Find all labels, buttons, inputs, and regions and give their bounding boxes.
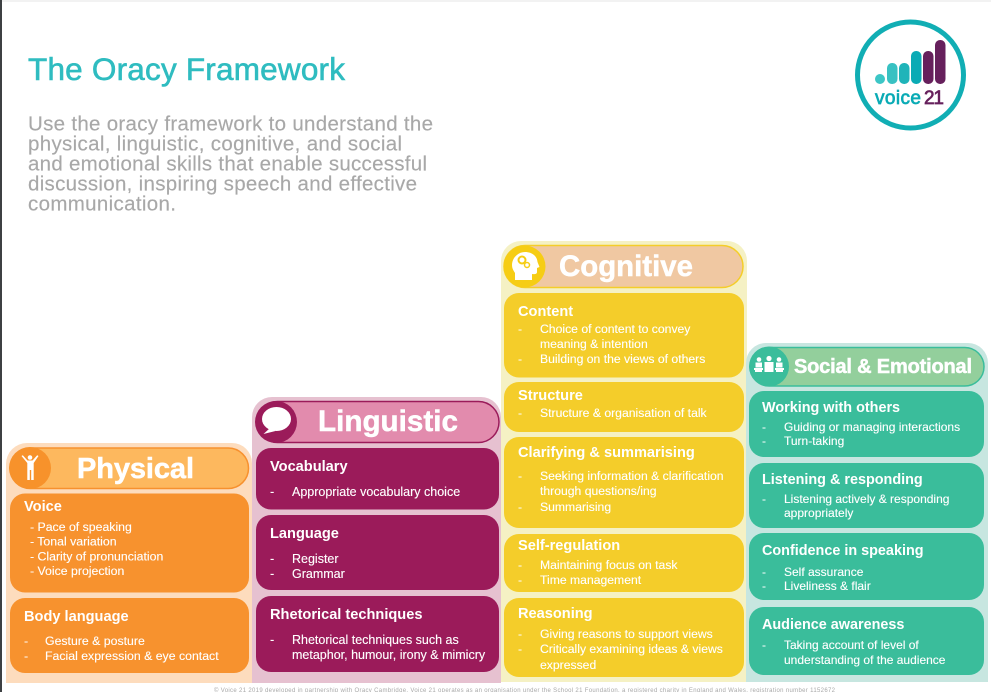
card: listening and responding: -	[762, 492, 766, 506]
icon: three people at a table	[754, 356, 784, 372]
card: vocabulary: Vocabulary	[270, 459, 348, 475]
card: body language: -	[24, 649, 28, 663]
card: language: Grammar	[292, 567, 345, 581]
card: body language	[10, 598, 249, 673]
card: listening and responding: Listening & responding	[762, 472, 923, 488]
intro text	[28, 112, 433, 216]
linguistic header: Linguistic	[318, 405, 458, 438]
card: clarifying and summarising: -	[518, 469, 522, 483]
card: rhetorical techniques	[256, 596, 499, 672]
cognitive header	[504, 246, 743, 288]
card: reasoning: -	[518, 627, 522, 641]
card: structure	[504, 382, 744, 432]
card: content: -	[518, 322, 522, 336]
card: body language: Gesture & posture	[45, 634, 145, 648]
card: self-regulation: Self-regulation	[518, 538, 620, 554]
panel: cognitive	[501, 241, 747, 682]
card: reasoning: Reasoning	[518, 606, 593, 622]
card: clarifying and summarising	[504, 437, 744, 528]
card: content: Building on the views of others	[540, 352, 705, 366]
card: body language: Facial expression & eye contact	[45, 649, 219, 663]
card: confidence in speaking: Self assurance	[784, 565, 864, 579]
card: working with others: -	[762, 420, 766, 434]
card: self-regulation: Maintaining focus on task	[540, 558, 678, 572]
card: content: Choice of content to convey	[540, 322, 691, 336]
card: clarifying and summarising: Clarifying & summarising	[518, 445, 695, 461]
card: working with others	[749, 391, 984, 457]
card: vocabulary	[256, 448, 499, 510]
card: language	[256, 515, 499, 590]
intro text: and emotional skills that enable successful	[28, 152, 427, 176]
intro text: discussion, inspiring speech and effective	[28, 172, 417, 196]
panel: linguistic	[252, 397, 501, 683]
card: working with others: Turn-taking	[784, 434, 844, 448]
card: listening and responding: appropriately	[784, 506, 853, 520]
logo: voice 21: voice	[875, 88, 921, 109]
card: content: meaning & intention	[540, 337, 648, 351]
card: working with others: -	[762, 434, 766, 448]
card: body language: Body language	[24, 609, 129, 625]
intro text: communication.	[28, 192, 176, 216]
card: voice: - Pace of speaking	[30, 520, 132, 534]
title: The Oracy Framework	[28, 51, 345, 87]
card: audience awareness: Audience awareness	[762, 617, 904, 633]
card: body language: -	[24, 634, 28, 648]
card: confidence in speaking: Liveliness & flair	[784, 579, 871, 593]
icon: head with gears	[512, 252, 540, 280]
card: audience awareness: understanding of the audience	[784, 653, 946, 667]
icon: speech bubble	[262, 407, 291, 434]
card: self-regulation: -	[518, 573, 522, 587]
social and emotional header: Social & Emotional	[794, 356, 972, 378]
card: working with others: Guiding or managing interactions	[784, 420, 960, 434]
card: rhetorical techniques: Rhetorical techniques	[270, 607, 422, 623]
card: content: -	[518, 352, 522, 366]
card: structure: -	[518, 406, 522, 420]
logo: voice 21	[858, 22, 964, 128]
card: listening and responding: Listening actively & responding	[784, 492, 949, 506]
card: voice	[10, 494, 249, 592]
card: clarifying and summarising: -	[518, 500, 522, 514]
card: rhetorical techniques: metaphor, humour, irony & mimicry	[292, 648, 486, 662]
card: structure: Structure	[518, 388, 583, 404]
card: confidence in speaking: Confidence in speaking	[762, 543, 924, 559]
card: voice: - Voice projection	[30, 564, 124, 578]
card: reasoning	[504, 598, 744, 677]
card: reasoning: -	[518, 642, 522, 656]
card: content	[504, 293, 744, 378]
linguistic header	[255, 401, 499, 443]
card: reasoning: expressed	[540, 658, 596, 672]
panel: physical	[6, 443, 252, 683]
panel: social and emotional	[746, 343, 988, 682]
card: self-regulation: -	[518, 558, 522, 572]
card: language: Language	[270, 526, 339, 542]
card: voice: - Clarity of pronunciation	[30, 550, 163, 564]
card: clarifying and summarising: through questions/ing	[540, 484, 657, 498]
physical header	[9, 447, 248, 489]
card: working with others: Working with others	[762, 400, 900, 416]
icon: person with raised arms	[22, 455, 38, 480]
card: self-regulation	[504, 534, 744, 592]
cognitive header: Cognitive	[559, 250, 693, 283]
card: voice: Voice	[24, 499, 62, 515]
social and emotional header	[749, 346, 984, 386]
card: confidence in speaking	[749, 533, 984, 600]
card: audience awareness: -	[762, 638, 766, 652]
card: listening and responding	[749, 463, 984, 528]
card: vocabulary: -	[270, 485, 274, 499]
card: language: Register	[292, 552, 339, 566]
card: audience awareness: Taking account of level of	[784, 638, 919, 652]
card: rhetorical techniques: Rhetorical techniques such as	[292, 633, 459, 647]
card: reasoning: Critically examining ideas & views	[540, 642, 723, 656]
card: confidence in speaking: -	[762, 565, 766, 579]
logo: voice 21: 21	[924, 88, 944, 109]
card: structure: Structure & organisation of talk	[540, 406, 708, 420]
card: audience awareness	[749, 607, 984, 675]
card: voice: - Tonal variation	[30, 534, 117, 548]
card: self-regulation: Time management	[540, 573, 642, 587]
card: language: -	[270, 567, 274, 581]
card: rhetorical techniques: -	[270, 633, 274, 647]
card: clarifying and summarising: Seeking information & clarification	[540, 469, 724, 483]
physical header: Physical	[77, 453, 194, 485]
card: reasoning: Giving reasons to support views	[540, 627, 713, 641]
card: clarifying and summarising: Summarising	[540, 500, 611, 514]
intro text: physical, linguistic, cognitive, and social	[28, 132, 402, 156]
card: vocabulary: Appropriate vocabulary choice	[292, 485, 460, 499]
card: confidence in speaking: -	[762, 579, 766, 593]
intro text: Use the oracy framework to understand the	[28, 112, 433, 136]
card: content: Content	[518, 304, 573, 320]
card: language: -	[270, 552, 274, 566]
